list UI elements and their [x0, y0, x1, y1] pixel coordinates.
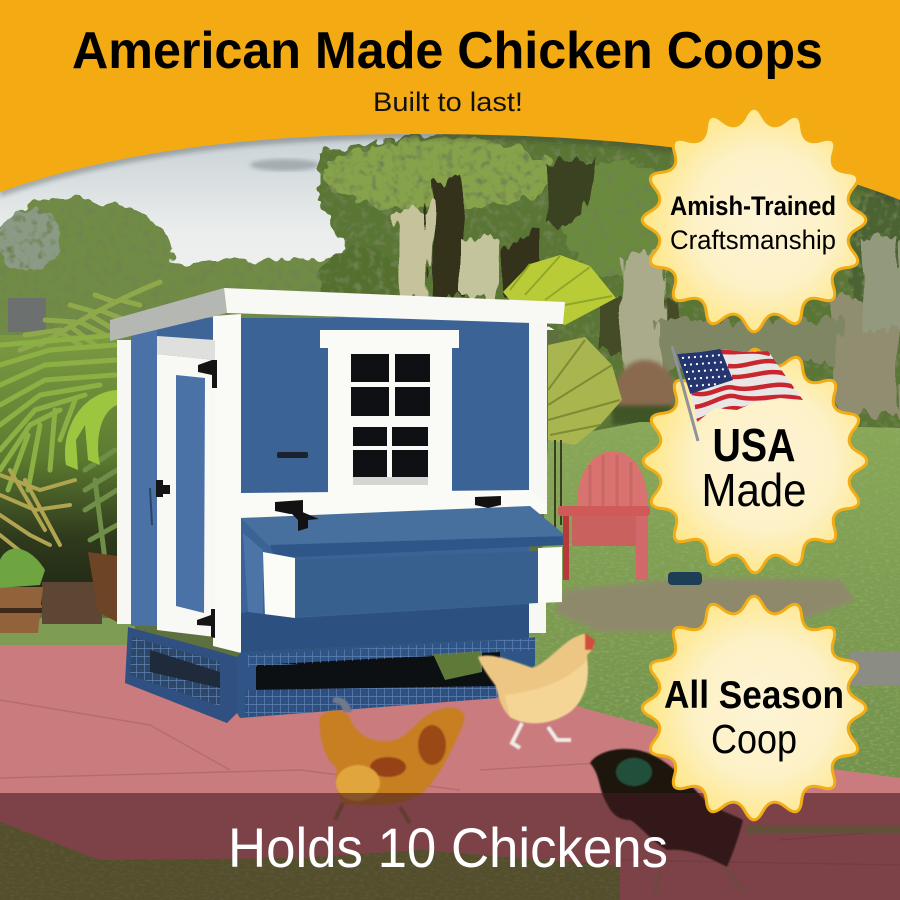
bright palm blade left — [65, 390, 117, 470]
chicken coop — [110, 288, 566, 723]
coop window — [320, 330, 459, 493]
banner text: Holds 10 Chickens: Holds 10 Chickens — [228, 816, 668, 879]
distant trees left — [0, 197, 420, 345]
left grass strip — [0, 618, 135, 650]
header shadow — [0, 100, 900, 205]
mesh base side — [125, 627, 237, 723]
water bowl — [668, 572, 702, 585]
badge: Amish-Trained Craftsmanship — [642, 108, 866, 332]
brick patio — [0, 645, 900, 900]
mesh base front — [237, 637, 535, 718]
left shadowed foliage — [0, 335, 118, 605]
coop wall handle — [277, 452, 308, 458]
badge: All Season Coop — [642, 596, 866, 820]
badge text: Amish-Trained — [670, 191, 836, 221]
badge text — [670, 191, 836, 255]
orange rooster — [320, 697, 465, 823]
nesting box — [241, 496, 566, 652]
icon: American flag — [670, 346, 803, 442]
badge text — [664, 674, 844, 762]
coop front wall — [241, 318, 529, 640]
badge text: Coop — [711, 716, 797, 762]
lawn — [500, 422, 900, 800]
shed roof in the distance — [8, 298, 46, 332]
coop right post — [529, 322, 547, 633]
dark trunks and shade — [430, 158, 680, 350]
title: American Made Chicken Coops — [72, 22, 823, 80]
wooden planters and pots — [0, 549, 117, 633]
flag pole — [672, 346, 698, 441]
palm fan behind coop, upper — [503, 255, 616, 325]
coop corner trim — [213, 314, 241, 653]
bottom banner band — [0, 793, 900, 900]
dirt patch — [555, 578, 855, 632]
stone path right — [850, 652, 900, 686]
badge shape — [642, 596, 866, 820]
coop roof — [110, 288, 565, 341]
lower-left grass — [0, 822, 620, 900]
spanish moss — [393, 205, 900, 415]
red adirondack chair — [558, 451, 650, 580]
badge text: All Season — [664, 674, 844, 717]
badge text: Made — [702, 464, 806, 516]
coop side wall — [117, 318, 213, 626]
badge text: Craftsmanship — [670, 225, 836, 255]
white rail — [241, 490, 547, 518]
coop door — [150, 336, 217, 638]
badge text: USA — [712, 419, 796, 471]
left palm fronds — [0, 282, 160, 560]
right grass strip — [745, 826, 900, 833]
sky — [0, 120, 900, 330]
subtitle: Built to last! — [373, 87, 523, 117]
orange header — [0, 0, 900, 200]
dark rooster — [590, 749, 745, 895]
brown ornamental grass — [612, 360, 675, 425]
buff hen — [478, 633, 595, 748]
badge shape — [642, 108, 866, 332]
badge text — [702, 419, 806, 516]
large oak trees — [320, 125, 900, 440]
badge shape — [643, 349, 867, 573]
palm fan behind coop, lower — [548, 337, 622, 530]
badge: USA Made — [643, 349, 867, 573]
flag cloth — [677, 349, 803, 422]
